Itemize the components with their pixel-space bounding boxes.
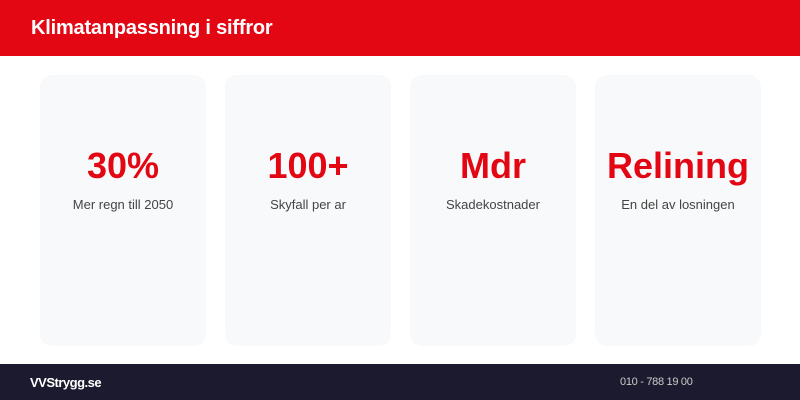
card: 100+ [225,75,391,346]
footer [0,364,800,400]
stat label: Skadekostnader [446,197,540,212]
card: Relining [595,75,761,346]
phone: 010 - 788 19 00 [620,376,693,388]
stat number: 30% [87,145,159,186]
stat label: Skyfall per ar [270,197,346,212]
title: Klimatanpassning i siffror [31,17,273,39]
stat number: 100+ [267,145,349,186]
card: 30% [40,75,206,346]
header [0,0,800,56]
stat label: Mer regn till 2050 [73,197,173,212]
stat number: Relining [607,145,749,186]
stat label: En del av losningen [621,197,735,212]
card: Mdr [410,75,576,346]
brand: VVStrygg.se [30,375,101,390]
stat number: Mdr [460,145,526,186]
